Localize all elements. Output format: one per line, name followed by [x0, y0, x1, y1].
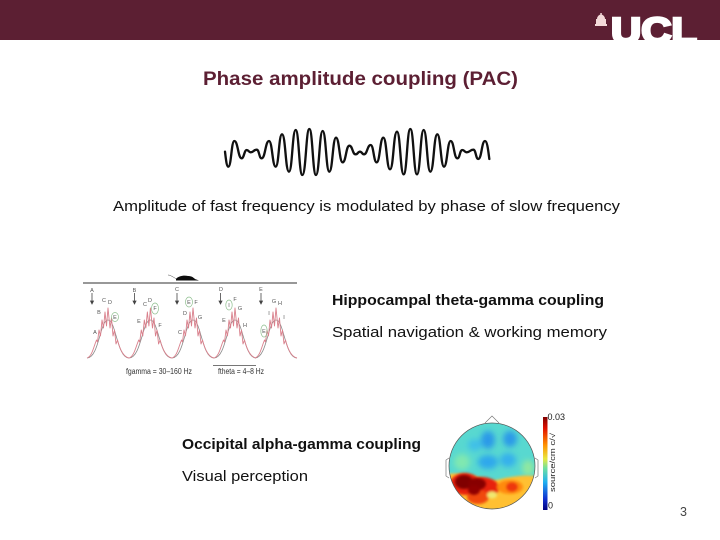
waveform: fast oscillation modulated by slow phase	[225, 129, 489, 175]
position letters	[90, 287, 285, 336]
position letters: H	[278, 301, 282, 307]
colour bar labels: 0	[548, 500, 553, 510]
position letters: F	[158, 323, 162, 329]
theta traces	[87, 320, 297, 358]
page number: 3	[680, 505, 687, 519]
head nose and ears	[446, 416, 538, 478]
position letters: E	[113, 315, 117, 321]
position letters: G	[272, 299, 276, 305]
position letters: A	[90, 288, 94, 294]
position letters: B	[97, 310, 101, 316]
position letters: F	[153, 306, 157, 312]
position letters: I	[228, 303, 230, 309]
scalp map	[449, 423, 535, 510]
colour bar labels: source/cm c/√	[549, 433, 557, 492]
position letters: E	[222, 318, 226, 324]
frequency labels: ftheta = 4–8 Hz	[218, 367, 264, 376]
text: hippocampal function: Spatial navigation & working memory	[332, 324, 608, 341]
text: hippocampal coupling heading: Hippocampal theta-gamma coupling	[332, 292, 604, 309]
position letters: H	[243, 323, 247, 329]
position letters: C	[175, 287, 179, 293]
frequency labels	[126, 367, 264, 376]
position letters: I	[268, 311, 270, 317]
position letters: D	[219, 287, 223, 293]
text: occipital function: Visual perception	[182, 468, 308, 485]
icon: UCL dome	[595, 13, 607, 26]
text: occipital coupling heading: Occipital alpha-gamma coupling	[182, 436, 421, 453]
position letters: B	[133, 288, 137, 294]
colour bar labels: 0.03	[548, 412, 565, 422]
colour bar	[543, 417, 548, 510]
icon: rat	[168, 275, 199, 280]
position letters: D	[108, 300, 112, 306]
position letters: E	[259, 287, 263, 293]
header bar	[0, 0, 720, 40]
position letters: I	[283, 315, 285, 321]
position letters: E	[262, 329, 266, 335]
position letters: A	[93, 330, 97, 336]
UCL logo: UCL	[611, 10, 697, 51]
position letters: F	[194, 300, 198, 306]
chart: scalp topography	[446, 412, 565, 510]
position letters: G	[238, 306, 242, 312]
gamma traces	[87, 308, 297, 358]
title: Phase amplitude coupling (PAC)	[203, 68, 518, 90]
position letters: F	[233, 297, 237, 303]
position letters: D	[183, 311, 187, 317]
track line	[83, 282, 297, 284]
position arrows	[90, 293, 262, 304]
position letters: C	[102, 298, 106, 304]
position letters: E	[137, 319, 141, 325]
position letters: C	[178, 330, 182, 336]
position letters: G	[198, 315, 202, 321]
frequency labels: fgamma = 30–160 Hz	[126, 367, 192, 376]
highlighted letters	[112, 297, 267, 337]
colour bar labels	[548, 412, 565, 510]
position letters: E	[187, 300, 191, 306]
position letters: C	[143, 302, 147, 308]
caption: amplitude modulated by phase: Amplitude of fast frequency is modulated by phase of slow frequency	[113, 198, 621, 215]
position letters: D	[148, 298, 152, 304]
chart: hippocampal theta-gamma traces	[83, 275, 297, 376]
